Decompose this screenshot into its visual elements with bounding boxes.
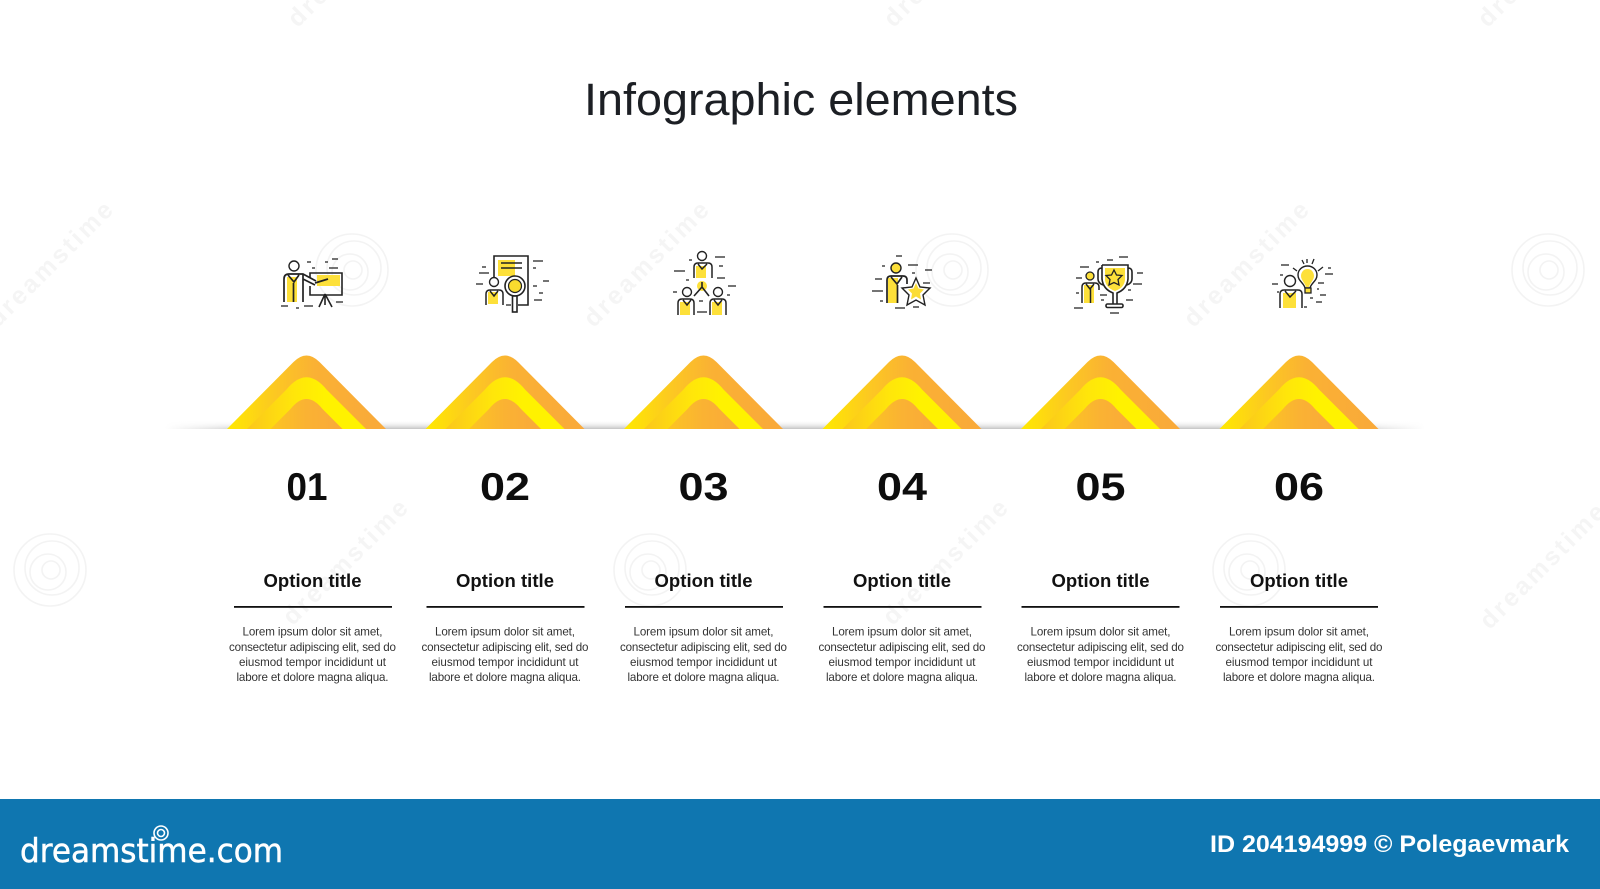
- option column 5: [1017, 570, 1184, 684]
- icon: presenter at board: [281, 259, 343, 308]
- baseline shadow: [165, 420, 1425, 429]
- description: labore et dolore magna aliqua.: [236, 671, 388, 684]
- icon: person with light bulb: [1272, 259, 1333, 308]
- chevron 4: [822, 356, 982, 429]
- option title: Option title: [1250, 570, 1348, 591]
- description: consectetur adipiscing elit, sed do: [1216, 641, 1382, 654]
- option title: Option title: [654, 570, 752, 591]
- number 03: 03: [678, 466, 728, 509]
- chevron 3: [624, 356, 783, 429]
- number 01: 01: [286, 466, 328, 509]
- number 06: 06: [1274, 466, 1324, 509]
- option column 4: [818, 570, 986, 684]
- description: [1216, 626, 1382, 684]
- watermark pattern: dreamstime: [877, 494, 1014, 631]
- watermark pattern: dreamstime: [578, 196, 715, 333]
- title: Infographic elements: [584, 74, 1018, 125]
- description: labore et dolore magna aliqua.: [1024, 671, 1176, 684]
- description: eiusmod tempor incididunt ut: [432, 656, 579, 669]
- footer logo: dreamstime.com: [20, 831, 283, 870]
- description: consectetur adipiscing elit, sed do: [1017, 641, 1184, 654]
- description: [229, 626, 396, 684]
- description: Lorem ipsum dolor sit amet,: [832, 626, 972, 638]
- option title: Option title: [1052, 570, 1150, 591]
- number 05: 05: [1076, 466, 1126, 509]
- watermark pattern: dreamstime: [1178, 196, 1315, 333]
- chevron 5: [1021, 356, 1180, 429]
- description: eiusmod tempor incididunt ut: [239, 656, 387, 669]
- watermark pattern: [0, 0, 1600, 635]
- icon: team hierarchy: [673, 252, 736, 315]
- description: eiusmod tempor incididunt ut: [1226, 656, 1373, 669]
- description: Lorem ipsum dolor sit amet,: [1229, 626, 1369, 638]
- description: eiusmod tempor incididunt ut: [630, 656, 778, 669]
- description: eiusmod tempor incididunt ut: [1027, 656, 1175, 669]
- description: Lorem ipsum dolor sit amet,: [634, 626, 774, 638]
- description: labore et dolore magna aliqua.: [429, 671, 581, 684]
- option title: Option title: [456, 570, 554, 591]
- number 02: 02: [480, 466, 530, 509]
- watermark pattern: dreamstime: [277, 494, 414, 631]
- description: eiusmod tempor incididunt ut: [828, 656, 976, 669]
- option column 6: [1216, 570, 1382, 684]
- description: Lorem ipsum dolor sit amet,: [435, 626, 575, 638]
- option column 3: [620, 570, 787, 684]
- description: [422, 626, 588, 684]
- chevron 1: [227, 356, 386, 429]
- option title: Option title: [853, 570, 951, 591]
- footer credit: ID 204194999 © Polegaevmark: [1210, 831, 1570, 858]
- description: labore et dolore magna aliqua.: [1223, 671, 1375, 684]
- description: consectetur adipiscing elit, sed do: [422, 641, 588, 654]
- description: consectetur adipiscing elit, sed do: [818, 641, 986, 654]
- description: labore et dolore magna aliqua.: [628, 671, 780, 684]
- description: [818, 626, 986, 684]
- description: labore et dolore magna aliqua.: [826, 671, 978, 684]
- description: [620, 626, 787, 684]
- number 04: 04: [877, 466, 927, 509]
- icon: person with trophy: [1074, 257, 1143, 313]
- description: [1017, 626, 1184, 684]
- description: Lorem ipsum dolor sit amet,: [1030, 626, 1170, 638]
- option column 1: [229, 570, 396, 684]
- footer bar: [0, 799, 1600, 889]
- description: consectetur adipiscing elit, sed do: [620, 641, 787, 654]
- chevron 2: [426, 356, 584, 429]
- icon: person with star: [872, 256, 932, 308]
- option title: Option title: [264, 570, 362, 591]
- description: Lorem ipsum dolor sit amet,: [242, 626, 382, 638]
- chevron 6: [1220, 356, 1378, 429]
- description: consectetur adipiscing elit, sed do: [229, 641, 396, 654]
- icon: document and magnifier: [476, 256, 549, 312]
- option column 2: [422, 570, 588, 684]
